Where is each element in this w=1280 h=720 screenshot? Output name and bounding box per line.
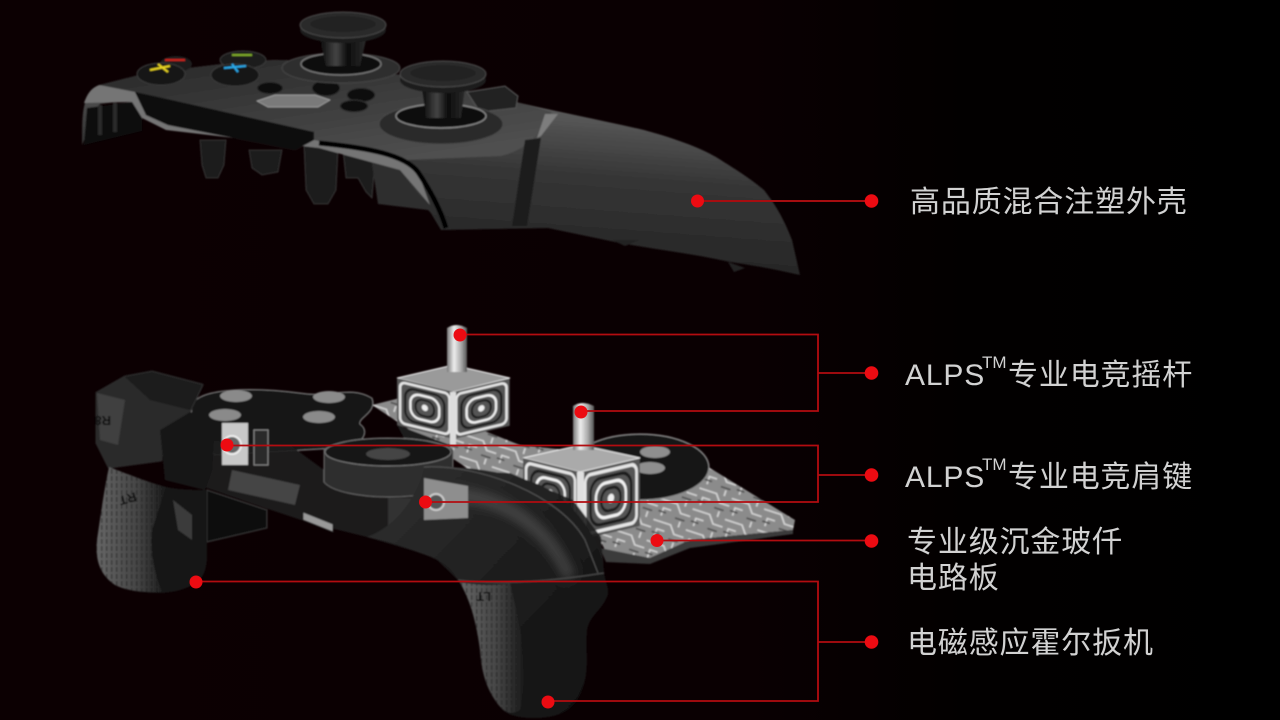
translucent centre body	[200, 440, 604, 580]
left trigger handle	[367, 467, 608, 718]
label: ALPS joystick: ALPS	[905, 359, 985, 392]
label: shell: 高品质混合注塑外壳	[910, 186, 1188, 219]
rim band	[84, 85, 430, 205]
main shell body	[82, 60, 800, 275]
right hinge	[160, 412, 215, 490]
label: circuit board: 专业级沉金玻仟	[907, 526, 1123, 559]
lower right stick cube	[523, 445, 640, 540]
label: ALPS joystick: TM	[982, 353, 1007, 372]
label: circuit board: 电路板	[907, 562, 1000, 595]
LT textured grip: LT	[476, 589, 491, 604]
label: ALPS shoulder keys: ALPS	[905, 461, 985, 494]
centre tray cup	[324, 438, 453, 497]
upper right stick cube	[397, 365, 510, 458]
shoulder switch left	[222, 423, 268, 465]
label: ALPS joystick: 专业电竞摇杆	[1008, 359, 1193, 392]
handle sheen	[450, 495, 570, 578]
joystick shaft two	[573, 403, 594, 450]
label: ALPS shoulder keys: TM	[982, 455, 1007, 474]
top shell controller illustration	[82, 12, 800, 275]
label: ALPS shoulder keys: 专业电竞肩键	[1008, 461, 1193, 494]
RT trigger	[97, 467, 207, 593]
right thumbstick	[379, 61, 503, 144]
face buttons	[137, 51, 266, 86]
callout: circuit board	[650, 534, 878, 548]
RT trigger: RT	[117, 489, 138, 508]
top surface	[99, 60, 552, 160]
LT textured grip	[460, 582, 524, 713]
exploded inner controller illustration	[94, 325, 795, 718]
joystick shaft one	[447, 325, 467, 372]
R8 back button housing: R8	[94, 413, 111, 428]
left thumbstick	[282, 12, 400, 83]
right tray	[571, 434, 709, 500]
right bumper detail	[467, 86, 518, 112]
callout: shell	[691, 194, 878, 208]
callout: joysticks	[454, 328, 878, 418]
left clover tray	[190, 390, 373, 455]
shoulder switch right	[424, 478, 468, 520]
inner shell wall	[370, 150, 446, 228]
label: hall triggers: 电磁感应霍尔扳机	[907, 627, 1154, 660]
under-shell pegs	[200, 140, 376, 204]
circuit board	[372, 398, 795, 558]
R8 back button housing	[94, 372, 202, 467]
black display strip	[135, 92, 314, 150]
USB port	[303, 512, 333, 532]
black groove	[319, 143, 446, 228]
bottom tabs	[612, 240, 745, 272]
small buttons and logo	[257, 80, 375, 112]
trigger back panel	[207, 490, 267, 542]
callout: triggers	[190, 576, 878, 708]
shell seam band	[512, 138, 541, 226]
callout: shoulder keys	[220, 438, 878, 508]
grip cut-out window	[84, 102, 142, 145]
